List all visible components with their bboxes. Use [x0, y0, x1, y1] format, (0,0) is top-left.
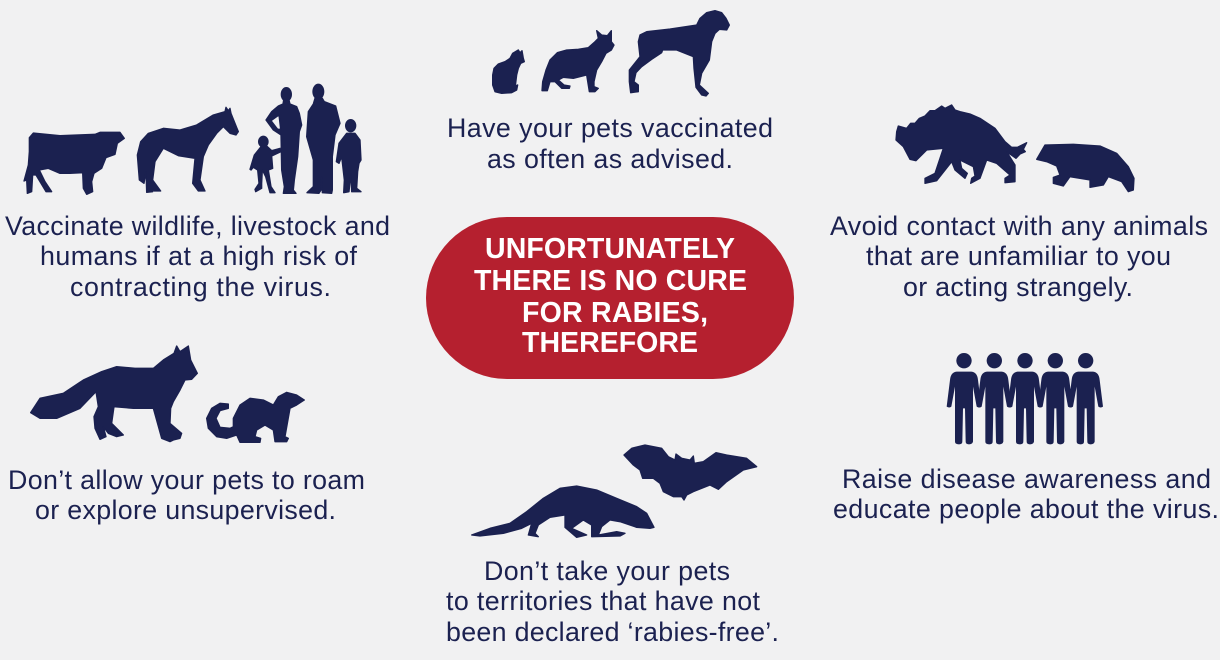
- text: avoid contact: or acting strangely.: [903, 272, 1133, 302]
- text: rabies-free territories: to territories that have not: [446, 586, 761, 616]
- text: avoid contact: Avoid contact with any animals: [830, 211, 1208, 241]
- icon: hyena and badger: [896, 105, 1134, 192]
- icon: human family: [250, 84, 361, 193]
- icon: wolf and ferret: [31, 346, 304, 442]
- text: do not allow roaming: or explore unsupervised.: [35, 495, 336, 525]
- center pill: therefore message: [426, 217, 794, 379]
- icon: mongoose and bat: [472, 445, 757, 537]
- text: have your pets vaccinated: as often as advised.: [487, 144, 733, 174]
- text: vaccinate wildlife: Vaccinate wildlife, livestock and: [5, 211, 390, 241]
- text: have your pets vaccinated: [447, 113, 773, 174]
- icon: cow and horse: [24, 107, 238, 194]
- text: vaccinate wildlife: humans if at a high risk of: [40, 241, 358, 271]
- text: do not allow roaming: [8, 465, 365, 525]
- text: rabies-free territories: [446, 556, 779, 647]
- text: rabies-free territories: been declared ‘rabies-free’.: [446, 617, 779, 647]
- text: vaccinate wildlife: contracting the virus.: [70, 272, 331, 302]
- center pill: therefore message: THEREFORE: [522, 327, 698, 359]
- icon: row of five people: [947, 353, 1103, 444]
- text: avoid contact: [830, 211, 1208, 302]
- text: avoid contact: that are unfamiliar to you: [866, 241, 1171, 271]
- center pill: therefore message: THERE IS NO CURE: [474, 265, 747, 297]
- text: raise disease awareness: educate people about the virus.: [833, 494, 1219, 524]
- text: rabies-free territories: Don’t take your pets: [484, 556, 730, 586]
- center pill: therefore message: FOR RABIES,: [522, 297, 708, 329]
- icon: cat and two dogs: [493, 11, 729, 96]
- text: raise disease awareness: [833, 464, 1219, 524]
- text: vaccinate wildlife: [5, 211, 390, 302]
- center pill: therefore message: UNFORTUNATELY: [485, 233, 735, 265]
- text: have your pets vaccinated: Have your pets vaccinated: [447, 113, 773, 143]
- text: do not allow roaming: Don’t allow your pets to roam: [8, 465, 365, 495]
- text: raise disease awareness: Raise disease awareness and: [842, 464, 1211, 494]
